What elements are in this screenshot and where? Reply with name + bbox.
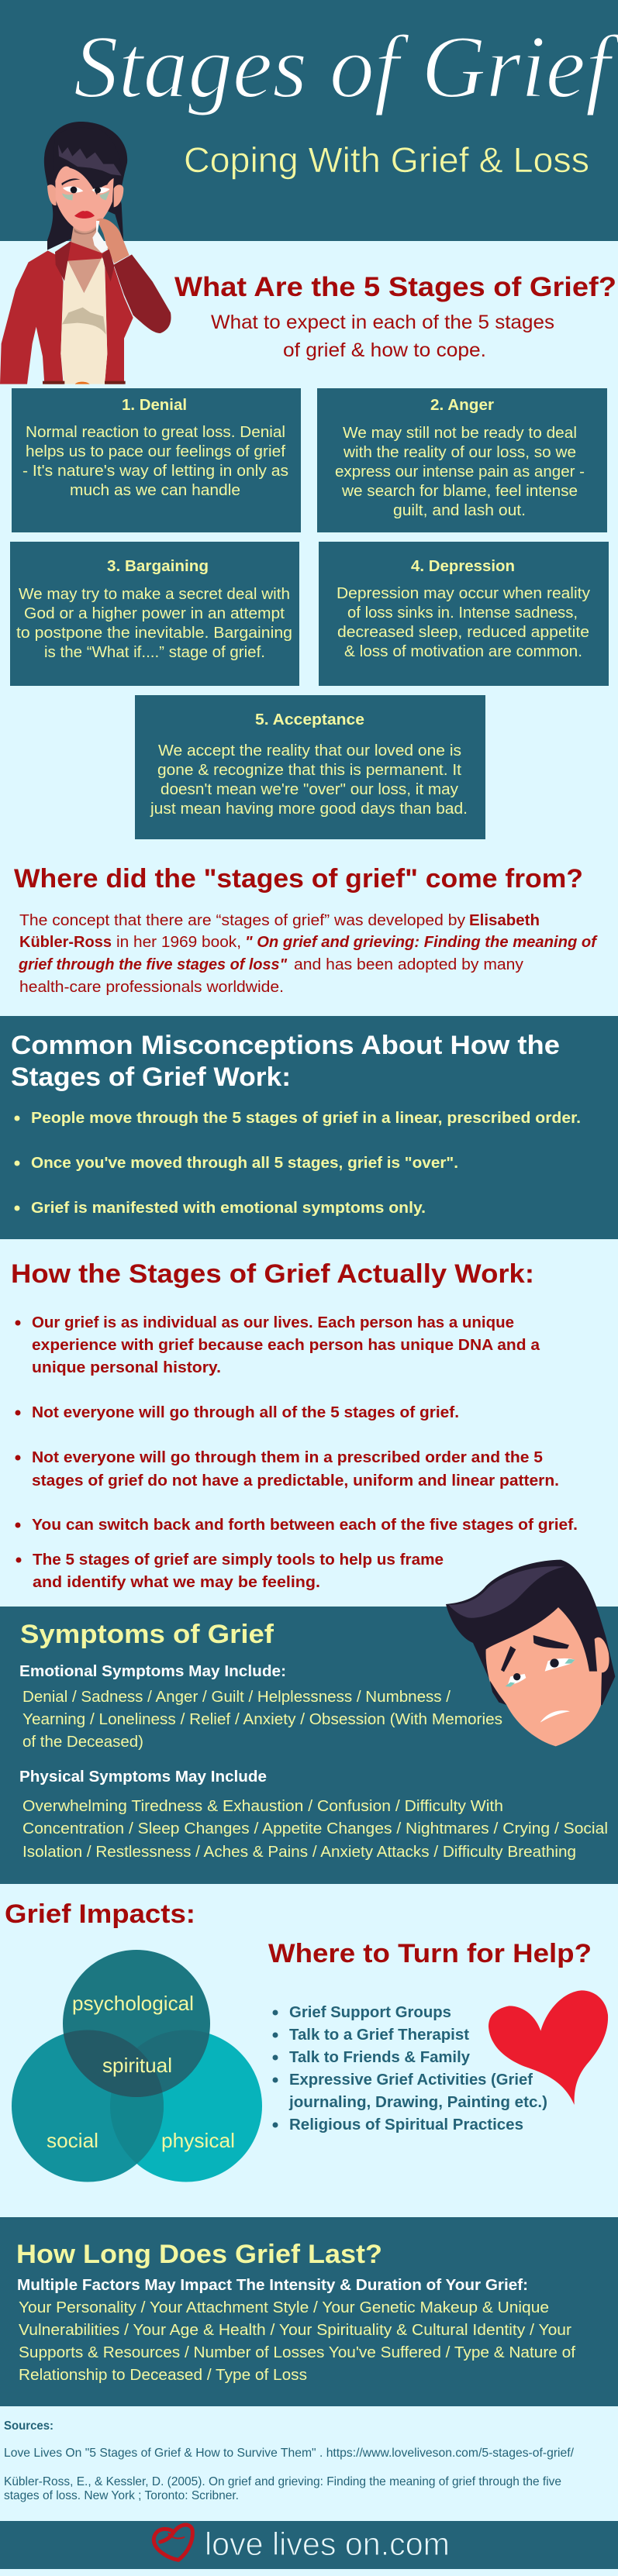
panel: anger — [317, 388, 607, 532]
panel: bargaining: is the “What if....” stage of grief. — [44, 644, 265, 661]
list: where to turn for help: Talk to a Grief Therapist — [289, 2027, 469, 2044]
text block: origin paragraph: Kübler-Ross — [19, 933, 112, 951]
list: factors — [19, 2299, 575, 2384]
list: physical symptoms: Concentration / Sleep Changes / Appetite Changes / Nightmares / Crying / Social — [22, 1820, 608, 1837]
list: emotional symptoms: of the Deceased) — [22, 1734, 143, 1751]
panel: acceptance: gone & recognize that this is permanent. It — [157, 762, 461, 779]
icon: red heart — [489, 1990, 608, 2105]
heading: misconceptions: Stages of Grief Work: — [11, 1062, 291, 1092]
list: factors: Relationship to Deceased / Type of Loss — [19, 2367, 307, 2384]
panel: acceptance — [135, 695, 485, 839]
list: misconceptions: Once you've moved through all 5 stages, grief is "over". — [31, 1155, 458, 1172]
list: where to turn for help: journaling, Drawing, Painting etc.) — [288, 2094, 547, 2111]
chart: venn diagram — [12, 1950, 262, 2182]
panel: denial — [12, 388, 301, 532]
heading: how long: How Long Does Grief Last? — [16, 2240, 382, 2269]
list: emotional symptoms — [22, 1689, 502, 1751]
text block: origin paragraph: grief through the five stages of loss" — [18, 956, 287, 973]
list: misconceptions: Grief is manifested with emotional symptoms only. — [31, 1200, 426, 1217]
text block: origin paragraph: " On grief and grieving: Finding the meaning of — [245, 933, 598, 951]
text block: origin paragraph: and has been adopted by many — [294, 956, 524, 973]
list: how the stages work: unique personal history. — [32, 1359, 221, 1376]
subheading: physical symptoms: Physical Symptoms May Include — [19, 1768, 267, 1786]
panel: depression: 4. Depression — [411, 558, 515, 575]
list: where to turn for help: Expressive Grief Activities (Grief — [289, 2071, 533, 2089]
heading: what are the 5 stages: What Are the 5 Stages of Grief? — [174, 272, 616, 302]
list: misconceptions: People move through the 5 stages of grief in a linear, prescribed order. — [31, 1110, 581, 1127]
header band — [0, 0, 618, 241]
list: physical symptoms: Isolation / Restlessness / Aches & Pains / Anxiety Attacks / Difficulty Breathing — [22, 1844, 576, 1861]
heading: where to turn for help: Where to Turn for Help? — [268, 1939, 592, 1968]
panel: bargaining: God or a higher power in an attempt — [24, 605, 285, 622]
text block: origin paragraph: Elisabeth — [469, 911, 540, 929]
subheading: emotional symptoms: Emotional Symptoms May Include: — [19, 1663, 286, 1680]
panel: denial: 1. Denial — [122, 397, 187, 414]
list: factors: Vulnerabilities / Your Age & Health / Your Spirituality & Cultural Identity / Your — [19, 2322, 571, 2339]
list: how the stages work: The 5 stages of grief are simply tools to help us frame — [33, 1551, 444, 1569]
text block: origin paragraph: in her 1969 book, — [116, 933, 241, 951]
text block: sources: Sources: — [4, 2419, 54, 2433]
list: factors: Supports & Resources / Number of Losses You've Suffered / Type & Nature of — [19, 2344, 575, 2361]
panel: denial: - It's nature's way of letting in only as — [22, 463, 288, 480]
panel: depression: & loss of motivation are common. — [344, 643, 582, 660]
list: physical symptoms: Overwhelming Tiredness & Exhaustion / Confusion / Difficulty With — [22, 1798, 503, 1815]
list: where to turn for help: Religious of Spiritual Practices — [289, 2116, 523, 2133]
text block: sources — [4, 2419, 575, 2502]
panel: acceptance: just mean having more good days than bad. — [150, 801, 468, 818]
panel: anger: 2. Anger — [430, 397, 494, 414]
list: how the stages work: and identify what we may be feeling. — [33, 1574, 320, 1591]
label: physical: physical — [161, 2129, 235, 2152]
subheading: multiple factors: Multiple Factors May Impact The Intensity & Duration of Your Grief: — [17, 2277, 528, 2294]
text block: sources: Kübler-Ross, E., & Kessler, D. (2005). On grief and grieving: Finding the meaning of grief through the five — [4, 2475, 561, 2488]
panel: bargaining — [10, 542, 299, 686]
panel: acceptance: doesn't mean we're "over" our loss, it may — [161, 781, 458, 798]
list: how the stages work: You can switch back and forth between each of the five stages of grief. — [32, 1517, 578, 1534]
panel: bargaining: to postpone the inevitable. Bargaining — [16, 625, 292, 642]
list: factors: Your Personality / Your Attachment Style / Your Genetic Makeup & Unique — [19, 2299, 549, 2316]
list: emotional symptoms: Denial / Sadness / Anger / Guilt / Helplessness / Numbness / — [22, 1689, 451, 1706]
panel: anger: We may still not be ready to deal — [343, 425, 577, 442]
heading: where did the stages come from: Where did the "stages of grief" come from? — [14, 864, 583, 894]
panel: how long does grief last — [0, 2217, 618, 2406]
panel: anger: guilt, and lash out. — [393, 502, 526, 519]
icon: crying man — [446, 1560, 615, 1746]
panel: acceptance: 5. Acceptance — [255, 711, 364, 728]
title: Stages of Grief — [74, 18, 618, 117]
panel: denial: much as we can handle — [70, 482, 240, 499]
list: misconceptions — [14, 1110, 581, 1217]
panel: anger: express our intense pain as anger - — [335, 463, 585, 480]
list: physical symptoms — [22, 1798, 608, 1861]
text block: origin paragraph — [18, 911, 598, 996]
panel: anger: with the reality of our loss, so we — [343, 444, 576, 461]
heading: misconceptions: Common Misconceptions About How the — [11, 1031, 560, 1060]
list: how the stages work: Our grief is as individual as our lives. Each person has a unique — [32, 1314, 514, 1331]
list: emotional symptoms: Yearning / Loneliness / Relief / Anxiety / Obsession (With Memories — [22, 1711, 502, 1728]
text block: origin paragraph: health-care professionals worldwide. — [19, 978, 284, 996]
panel: denial: helps us to pace our feelings of grief — [26, 443, 285, 460]
label: spiritual: spiritual — [102, 2054, 172, 2077]
logo text: love lives on.com — [205, 2526, 450, 2562]
list: where to turn for help — [273, 2004, 547, 2133]
list: where to turn for help: Talk to Friends & Family — [289, 2049, 471, 2066]
list: how the stages work: stages of grief do not have a predictable, uniform and linear pattern. — [32, 1472, 559, 1489]
label: social: social — [47, 2129, 98, 2152]
list: how the stages work: Not everyone will go through them in a prescribed order and the 5 — [32, 1449, 543, 1466]
panel: anger: we search for blame, feel intense — [341, 483, 578, 500]
panel: denial: Normal reaction to great loss. Denial — [26, 424, 285, 441]
heading: symptoms: Symptoms of Grief — [20, 1620, 274, 1649]
panel: depression: decreased sleep, reduced appetite — [337, 624, 589, 641]
subheading: What to expect in each of the 5 stages — [211, 312, 554, 333]
subheading: of grief & how to cope. — [283, 339, 486, 361]
subheading — [211, 312, 554, 361]
icon: logo heart — [154, 2525, 192, 2560]
list: how the stages work: experience with grief because each person has unique DNA and a — [32, 1337, 540, 1354]
panel: bargaining: 3. Bargaining — [107, 558, 209, 575]
label: psychological: psychological — [72, 1992, 194, 2015]
text block: sources: stages of loss. New York ; Toronto: Scribner. — [4, 2489, 239, 2502]
footer band — [0, 2521, 618, 2569]
list: how the stages work: Not everyone will go through all of the 5 stages of grief. — [32, 1404, 459, 1421]
panel: symptoms of grief — [0, 1607, 618, 1884]
heading: misconceptions — [11, 1031, 560, 1092]
panel: common misconceptions — [0, 1016, 618, 1239]
subtitle: Coping With Grief & Loss — [184, 140, 589, 180]
panel: bargaining: We may try to make a secret deal with — [19, 586, 290, 603]
heading: grief impacts: Grief Impacts: — [5, 1899, 195, 1929]
panel: acceptance: We accept the reality that our loved one is — [158, 742, 461, 759]
panel: depression: Depression may occur when reality — [337, 585, 590, 602]
list: how the stages work — [16, 1314, 578, 1591]
panel: depression — [319, 542, 609, 686]
icon: crying woman — [0, 122, 171, 384]
list: where to turn for help: Grief Support Groups — [289, 2004, 451, 2021]
panel: depression: of loss sinks in. Intense sadness, — [347, 604, 578, 622]
heading: how the stages actually work: How the Stages of Grief Actually Work: — [11, 1259, 534, 1289]
text block: origin paragraph: The concept that there are “stages of grief” was developed by — [19, 911, 466, 929]
text block: sources: Love Lives On "5 Stages of Grief & How to Survive Them" . https://www.loveliveson.com/5-stages-of-grief/ — [4, 2447, 575, 2460]
